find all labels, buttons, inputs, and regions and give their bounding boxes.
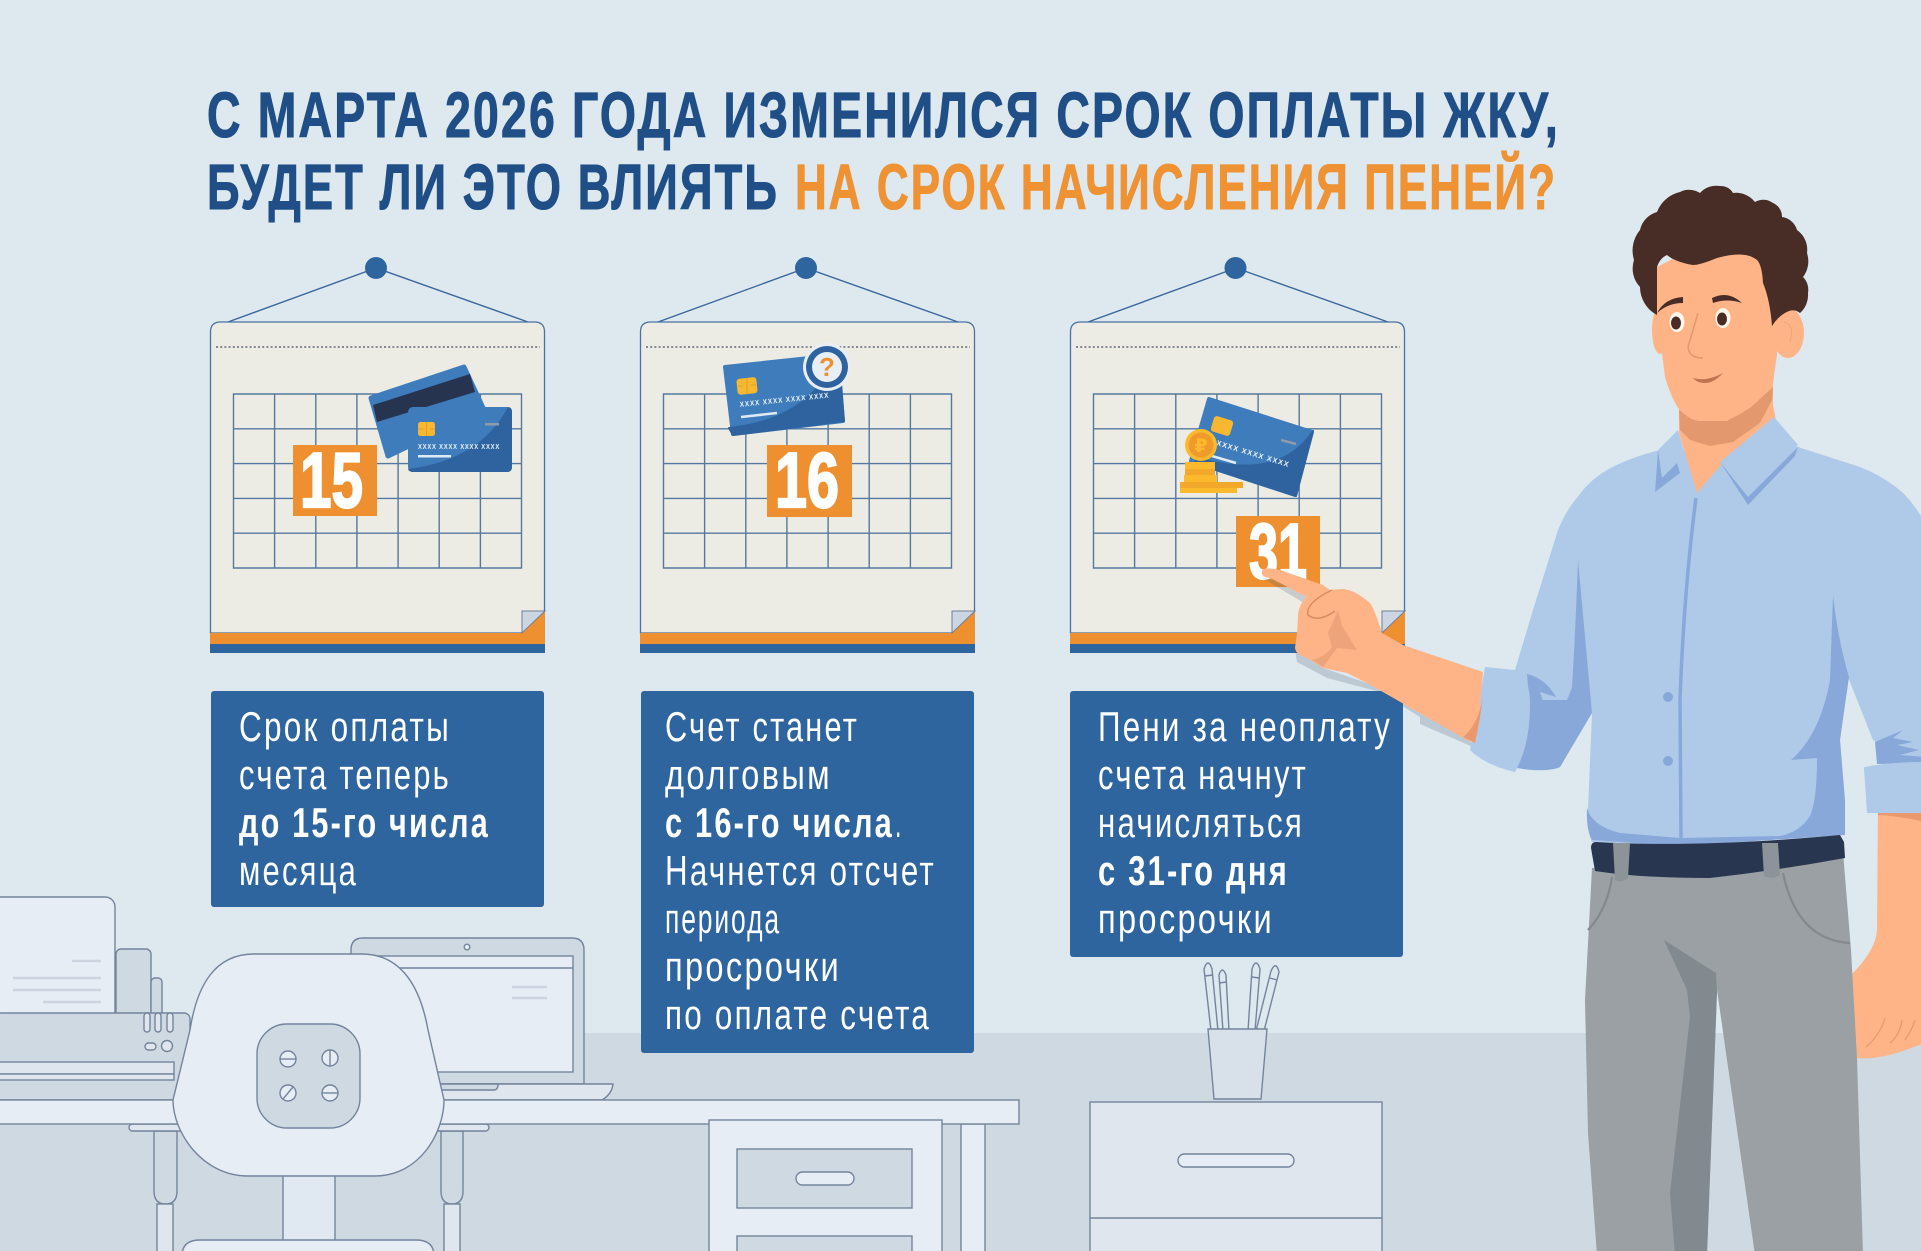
hand shadow bbox=[1262, 578, 1480, 750]
cabinet with pencil cup bbox=[1090, 963, 1382, 1251]
title bbox=[207, 79, 1560, 223]
icon: bank card with ruble coins: ₽ bbox=[1194, 435, 1208, 457]
belt bbox=[1591, 835, 1845, 882]
title: БУДЕТ ЛИ ЭТО ВЛИЯТЬ bbox=[207, 151, 779, 223]
panel: text 1: Срок оплаты bbox=[239, 703, 451, 750]
trousers bbox=[1585, 852, 1863, 1251]
icon: bank card with question badge: XXXX XXXX XXXX XXXX bbox=[739, 391, 830, 409]
shirt cuffs bbox=[1470, 667, 1530, 772]
shirt bbox=[1470, 447, 1921, 846]
shirt collar bbox=[1655, 417, 1798, 505]
face details bbox=[1657, 297, 1683, 313]
panel: text 2: просрочки bbox=[665, 943, 841, 990]
panel: text 2: по оплате счета bbox=[665, 991, 931, 1038]
panel: text 1: счета теперь bbox=[239, 751, 451, 798]
icon: two bank cards bbox=[371, 367, 512, 472]
panel: text 2 bbox=[641, 691, 974, 1053]
panel: text 1: месяца bbox=[239, 847, 358, 894]
head and neck bbox=[1633, 186, 1808, 493]
date 16: 16 bbox=[775, 436, 839, 524]
hair bbox=[1633, 186, 1808, 326]
title: НА СРОК НАЧИСЛЕНИЯ ПЕНЕЙ? bbox=[795, 150, 1557, 223]
panel: text 1: до 15-го числа bbox=[239, 799, 490, 846]
office chair bbox=[173, 954, 444, 1251]
panel: text 1 bbox=[211, 691, 544, 907]
date 15: 15 bbox=[300, 436, 363, 524]
panel: text 3: просрочки bbox=[1098, 895, 1274, 942]
icon: bank card with ruble coins: XXXX XXXX XXXX bbox=[1215, 438, 1291, 469]
panel: text 2: долговым bbox=[665, 751, 832, 798]
panel: text 2: с 16-го числа bbox=[665, 799, 894, 846]
pointing hand and forearm bbox=[1262, 568, 1483, 743]
calendar 3: 31st bbox=[1070, 257, 1405, 653]
right arm and hand bbox=[1851, 806, 1921, 1058]
desk bbox=[0, 1100, 1019, 1251]
calendar 1: 15th bbox=[210, 257, 545, 653]
calendar 2: 16th bbox=[640, 257, 975, 653]
panel: text 2: периода bbox=[665, 895, 781, 942]
man pointing at the calendar bbox=[1262, 186, 1921, 1251]
panel: text 2: Начнется отсчет bbox=[665, 847, 936, 894]
panel: text 3: с 31-го дня bbox=[1098, 847, 1289, 894]
panel: text 3: начисляться bbox=[1098, 799, 1304, 846]
panel: text 2: Счет станет bbox=[665, 703, 859, 750]
panel: text 3: счета начнут bbox=[1098, 751, 1308, 798]
icon: bank card with ruble coins bbox=[1180, 399, 1313, 496]
laptop bbox=[351, 938, 613, 1100]
date 31: 31 bbox=[1249, 507, 1307, 595]
icon: two bank cards: XXXX XXXX XXXX XXXX bbox=[418, 442, 500, 451]
printer bbox=[0, 897, 190, 1100]
panel: text 3 bbox=[1070, 691, 1403, 957]
icon: bank card with question badge: ? bbox=[819, 352, 835, 382]
icon: bank card with question badge bbox=[725, 343, 851, 435]
panel: text 2: . bbox=[895, 799, 903, 846]
panel: text 3: Пени за неоплату bbox=[1098, 703, 1392, 750]
